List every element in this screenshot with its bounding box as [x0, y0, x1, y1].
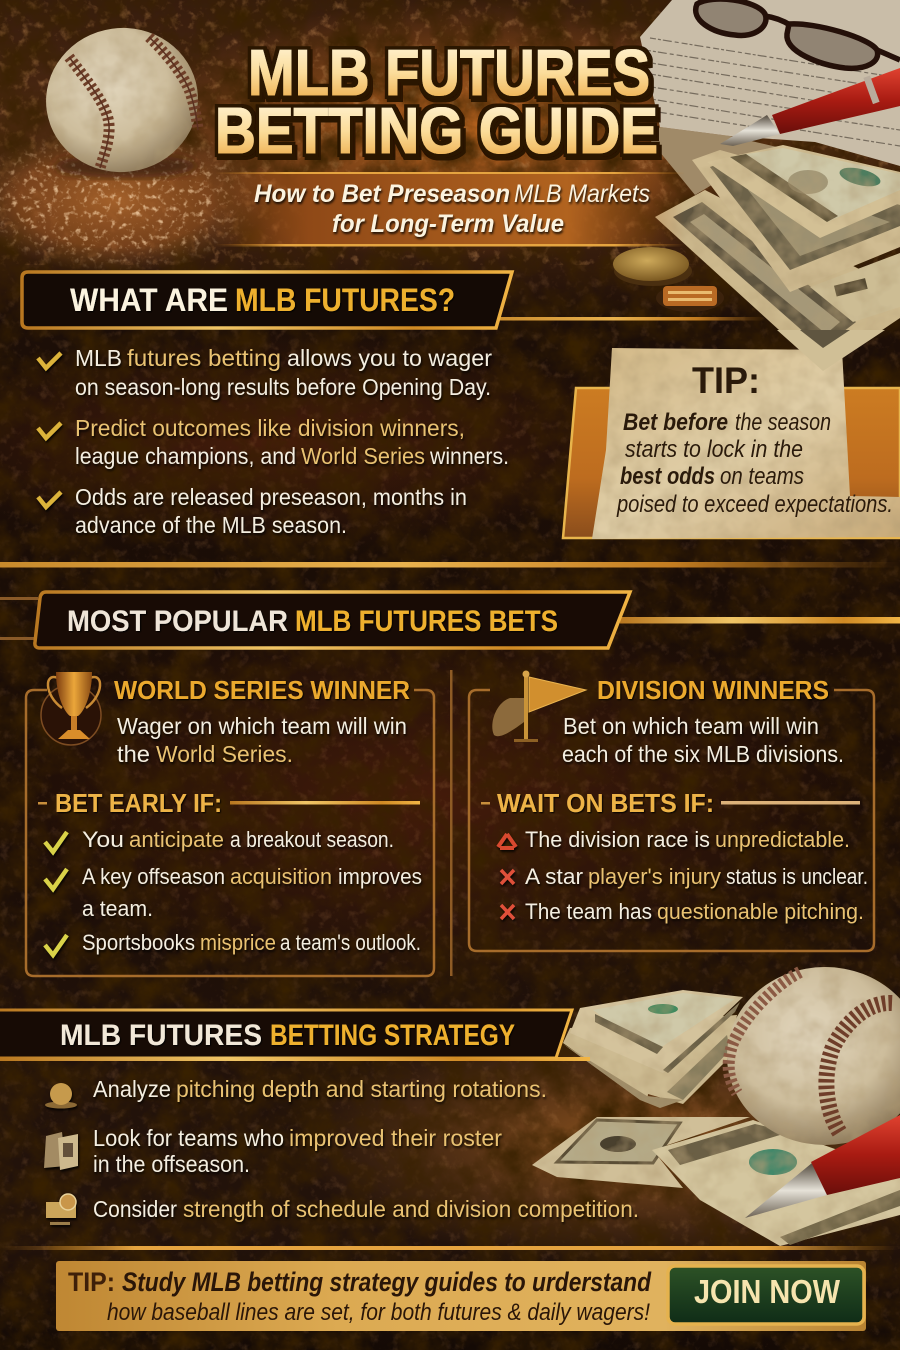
check 3	[38, 492, 61, 507]
cross list: wait on bets: player's injury	[588, 864, 721, 889]
section heading: most popular bets: MOST POPULAR	[67, 605, 288, 638]
strategy list	[44, 1076, 639, 1225]
bills stack	[655, 145, 900, 370]
tip text: on teams	[720, 463, 804, 490]
bet early heading	[38, 788, 420, 818]
tip text	[68, 1267, 651, 1326]
panel: division winners	[469, 670, 874, 951]
icon: trophy	[41, 672, 101, 745]
icon: roster cards	[44, 1132, 78, 1170]
card description	[562, 713, 844, 767]
strategy 2: in the offseason.	[93, 1151, 250, 1177]
coins	[613, 247, 724, 312]
card description	[117, 713, 407, 767]
bullet 3	[75, 484, 467, 538]
card title: WORLD SERIES WINNER	[114, 675, 410, 705]
check 1	[38, 353, 61, 368]
card description: Wager on which team will win	[117, 713, 407, 739]
photo: papers, glasses, pen and cash	[613, 0, 900, 330]
check list: bet early: acquisition	[230, 864, 332, 889]
red pen	[745, 1115, 900, 1218]
cross list: wait on bets: The division race is	[525, 827, 710, 852]
check list: bet early: You	[82, 827, 124, 852]
bullet 1: futures betting	[127, 345, 281, 371]
divider rule	[0, 1246, 900, 1250]
card description: the	[117, 741, 150, 767]
cross list: wait on bets	[498, 827, 868, 924]
lower left bill	[532, 1117, 750, 1188]
check list: bet early: a breakout season.	[230, 827, 394, 852]
cross list: wait on bets: The team has	[525, 899, 652, 924]
strategy 3: Consider	[93, 1196, 177, 1222]
glasses	[696, 0, 900, 68]
cross list: wait on bets: unpredictable.	[715, 827, 850, 852]
icon: flag	[492, 670, 586, 742]
strategy 1: pitching depth and starting rotations.	[176, 1076, 547, 1102]
panel: world series winner	[26, 672, 434, 976]
wait on bets heading: WAIT ON BETS IF:	[497, 788, 714, 818]
subtitle band	[215, 172, 685, 246]
bullet 1: MLB	[75, 345, 122, 371]
check list: bet early: improves	[338, 864, 422, 889]
baseball	[727, 967, 900, 1145]
bill corner over tip note	[777, 330, 885, 371]
section heading: what are MLB futures: MLB FUTURES?	[235, 282, 455, 318]
title	[215, 36, 658, 167]
bullet 2: World Series	[301, 443, 425, 469]
section heading: most popular bets: MLB FUTURES BETS	[295, 605, 558, 638]
futures explanation list	[38, 345, 509, 538]
check list: bet early: a team's outlook.	[280, 930, 421, 955]
red pen	[720, 68, 900, 146]
bullet 1: on season-long results before Opening Day.	[75, 374, 491, 400]
title: MLB FUTURES	[248, 36, 650, 109]
tip text: TIP:	[68, 1267, 115, 1297]
join now button	[668, 1266, 864, 1324]
subtitle text	[254, 180, 650, 238]
notes paper	[640, 0, 900, 195]
tip text: Study MLB betting strategy guides to urderstand	[122, 1267, 651, 1297]
check list: bet early: A key offseason	[82, 864, 225, 889]
bullet 1: allows you to wager	[287, 345, 492, 371]
section heading: what are MLB futures: WHAT ARE	[70, 282, 228, 318]
tip text: starts to lock in the	[625, 436, 803, 463]
bullet 2: Predict outcomes like division winners,	[75, 415, 465, 441]
check 2	[38, 423, 61, 438]
subtitle text: MLB Markets	[514, 180, 650, 208]
tip text: the season	[735, 409, 831, 436]
check list: bet early: misprice	[200, 930, 276, 955]
icon: baseball badge	[45, 1083, 77, 1108]
call to action bar	[56, 1261, 866, 1331]
tip note	[563, 348, 900, 539]
wait on bets heading	[481, 788, 860, 818]
card description: each of the six MLB divisions.	[562, 741, 844, 767]
card title: DIVISION WINNERS	[597, 675, 829, 705]
title: BETTING GUIDE	[215, 94, 658, 167]
tip text: Bet before	[623, 409, 728, 436]
cash stack	[563, 990, 743, 1108]
column divider	[450, 670, 452, 976]
photo: cash, baseball and pen	[532, 967, 900, 1246]
bullet 2: winners.	[429, 443, 509, 469]
bullet 2: league champions, and	[75, 443, 296, 469]
section heading: betting strategy: BETTING STRATEGY	[270, 1019, 515, 1052]
subtitle text: How to Bet Preseason	[254, 180, 510, 208]
bullet 3: advance of the MLB season.	[75, 512, 347, 538]
photo: baseball on dirt	[0, 18, 265, 272]
bet early heading: BET EARLY IF:	[55, 788, 222, 818]
check list: bet early	[45, 827, 422, 955]
section heading: most popular bets	[0, 562, 900, 648]
strategy 1: Analyze	[93, 1076, 171, 1102]
tip heading: TIP:	[692, 360, 760, 401]
card description: World Series.	[156, 741, 293, 767]
tip text	[616, 409, 893, 518]
icon: schedule	[46, 1194, 76, 1225]
cross list: wait on bets: A star	[525, 864, 583, 889]
card description: Bet on which team will win	[563, 713, 819, 739]
tip text: best odds	[620, 463, 715, 490]
check list: bet early: Sportsbooks	[82, 930, 195, 955]
section heading: betting strategy	[0, 1010, 590, 1061]
bullet 3: Odds are released preseason, months in	[75, 484, 467, 510]
strategy 3: strength of schedule and division competition.	[183, 1196, 639, 1222]
cross list: wait on bets: questionable pitching.	[657, 899, 864, 924]
strategy 2: improved their roster	[289, 1125, 502, 1151]
tip text: how baseball lines are set, for both futures & daily wagers!	[107, 1299, 650, 1326]
lower right bill	[652, 1120, 900, 1246]
subtitle text: for Long-Term Value	[332, 210, 564, 238]
check list: bet early: anticipate	[129, 827, 224, 852]
cross list: wait on bets: status is unclear.	[726, 864, 868, 889]
check list: bet early: a team.	[82, 896, 153, 921]
bullet 2	[75, 415, 509, 469]
join now button: JOIN NOW	[694, 1273, 841, 1310]
section heading: betting strategy: MLB FUTURES	[60, 1019, 262, 1052]
strategy 2	[93, 1125, 502, 1177]
bullet 1	[75, 345, 492, 400]
strategy 2: Look for teams who	[93, 1125, 284, 1151]
section heading: what are MLB futures	[22, 272, 765, 328]
